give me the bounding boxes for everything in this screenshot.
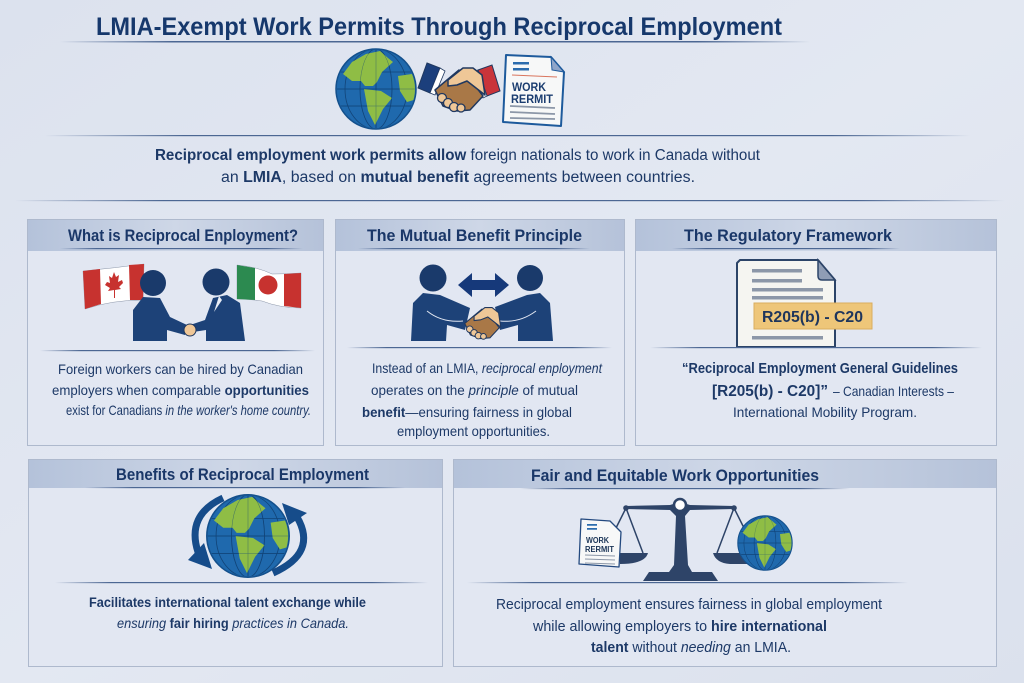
panel: benefits of reciprocal employment (28, 460, 442, 666)
panel: regulatory framework (636, 220, 996, 446)
text block: employers when comparable opportunities (52, 382, 309, 398)
heading: benefits: Benefits of Reciprocal Employment (116, 466, 369, 484)
text block: employment opportunities. (397, 423, 550, 439)
text block: Facilitates international talent exchange while (89, 594, 366, 610)
icon: two people shaking hands with arrow (411, 264, 553, 341)
icon: balance scale with permit and globe: RERMIT (585, 545, 614, 554)
text block: while allowing employers to hire international (532, 618, 827, 635)
text block: benefit—ensuring fairness in global (362, 404, 572, 420)
panel: mutual benefit principle (336, 220, 624, 446)
text block: – Canadian Interests – (833, 383, 954, 399)
text block: Reciprocal employment ensures fairness in global employment (496, 596, 883, 613)
intro text: an LMIA, based on mutual benefit agreements between countries. (221, 169, 695, 186)
icon: balance scale with permit and globe: WORK (586, 536, 609, 545)
text block (682, 360, 958, 420)
panel: fair and equitable work opportunities (454, 460, 996, 666)
icon: globe with circular arrows (188, 495, 307, 577)
icon: document with R205(b) - C20 tag (737, 260, 872, 347)
heading: regulatory framework: The Regulatory Framework (684, 227, 893, 245)
intro text: Reciprocal employment work permits allow foreign nationals to work in Canada without (155, 147, 761, 164)
icon: work permit document: RERMIT (511, 92, 554, 106)
icon: hero globe (336, 49, 418, 129)
text block: Foreign workers can be hired by Canadian (58, 361, 303, 377)
heading: mutual benefit principle: The Mutual Benefit Principle (367, 227, 582, 245)
panel: what is reciprocal employment (28, 220, 324, 446)
icon: flags and shaking hands (83, 264, 301, 341)
text block: ensuring fair hiring practices in Canada. (117, 615, 349, 631)
intro text (15, 135, 1005, 201)
text block: [R205(b) - C20]” (712, 383, 828, 400)
text block: International Mobility Program. (733, 404, 917, 420)
text block: “Reciprocal Employment General Guidelines (682, 360, 958, 377)
icon: balance scale with permit and globe (579, 499, 794, 581)
text block: Instead of an LMIA, reciprocal enployment (372, 360, 603, 376)
heading: fair and equitable: Fair and Equitable Work Opportunities (531, 467, 819, 485)
text block: exist for Canadians in the worker's home country. (66, 402, 311, 418)
text block (496, 596, 883, 656)
text block (362, 360, 603, 439)
text block: talent without needing an LMIA. (591, 639, 791, 656)
text block (89, 594, 366, 631)
title: LMIA-Exempt Work Permits Through Reciprocal Employment (96, 13, 783, 41)
icon: work permit document: WORK (512, 80, 546, 94)
text block: operates on the principle of mutual (371, 382, 578, 398)
text block (52, 361, 311, 418)
icon: work permit document (503, 55, 564, 126)
icon: hero handshake (418, 63, 500, 112)
heading: what is reciprocal employment: What is Reciprocal Enployment? (68, 227, 298, 245)
icon: document with R205(b) - C20 tag: R205(b) - C20 (762, 309, 863, 326)
